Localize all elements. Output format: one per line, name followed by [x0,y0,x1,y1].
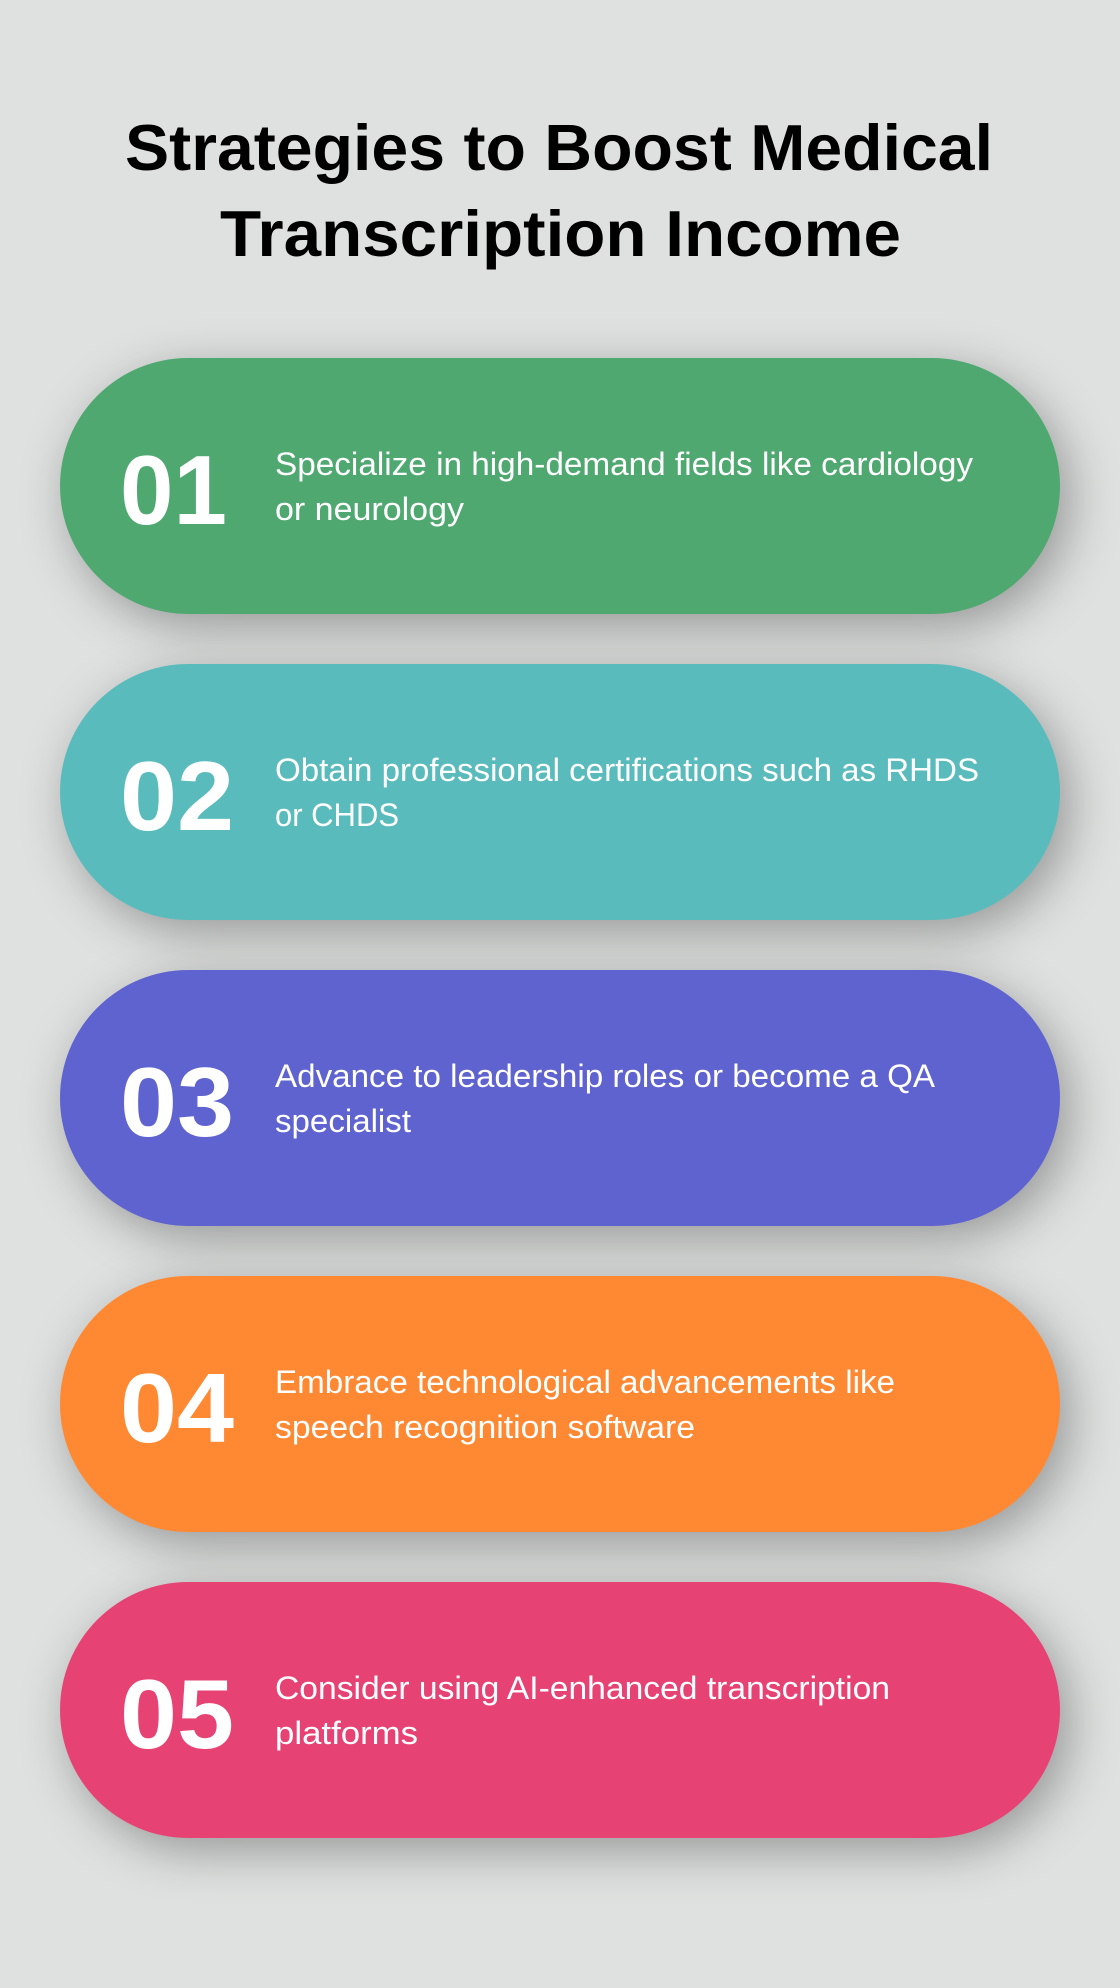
text: strategy 03: specialist [275,1103,411,1139]
number 01: 01 [120,435,227,545]
pink pill [60,1582,1060,1838]
orange pill [60,1276,1060,1532]
panel: strategy 03 [60,970,1060,1226]
text: strategy 05: Consider using AI-enhanced transcription [275,1670,890,1706]
title: Transcription Income [220,197,901,270]
number 05: 05 [120,1659,234,1769]
text: strategy 01: or neurology [275,491,464,527]
text: strategy 03 [275,1058,936,1139]
text: strategy 04: Embrace technological advancements like [275,1364,895,1400]
panel: strategy 04 [60,1276,1060,1532]
text: strategy 02: or CHDS [275,797,399,833]
text: strategy 01: Specialize in high-demand fields like cardiology [275,446,973,482]
text: strategy 02: Obtain professional certifications such as RHDS [275,752,979,788]
text: strategy 04 [275,1364,895,1445]
text: strategy 03: Advance to leadership roles or become a QA [275,1058,936,1094]
panel: strategy 01 [60,358,1060,614]
text: strategy 04: speech recognition software [275,1409,695,1445]
blue pill [60,970,1060,1226]
panel: strategy 05 [60,1582,1060,1838]
green pill [60,358,1060,614]
text: strategy 02 [275,752,979,833]
panel: strategy 02 [60,664,1060,920]
number 02: 02 [120,741,234,851]
text: strategy 05 [275,1670,890,1751]
number 04: 04 [120,1353,234,1463]
number 03: 03 [120,1047,234,1157]
teal pill [60,664,1060,920]
title: Strategies to Boost Medical [125,111,993,184]
text: strategy 05: platforms [275,1715,418,1751]
text: strategy 01 [275,446,973,527]
title [125,111,993,270]
